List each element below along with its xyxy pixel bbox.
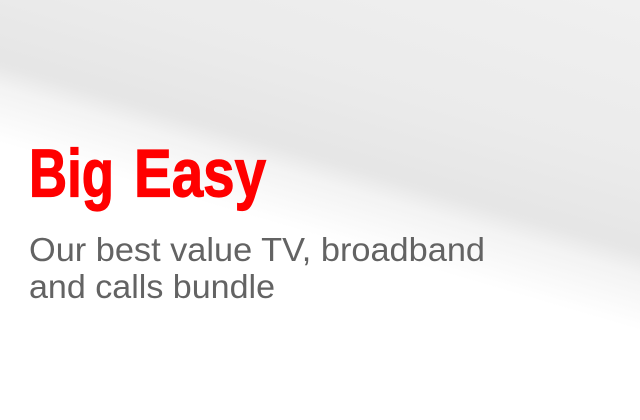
title: Easy — [134, 136, 266, 212]
title: Big — [29, 136, 114, 212]
subtitle — [29, 231, 485, 305]
subtitle: and calls bundle — [29, 268, 275, 305]
subtitle: Our best value TV, broadband — [29, 231, 485, 268]
title — [29, 136, 266, 212]
